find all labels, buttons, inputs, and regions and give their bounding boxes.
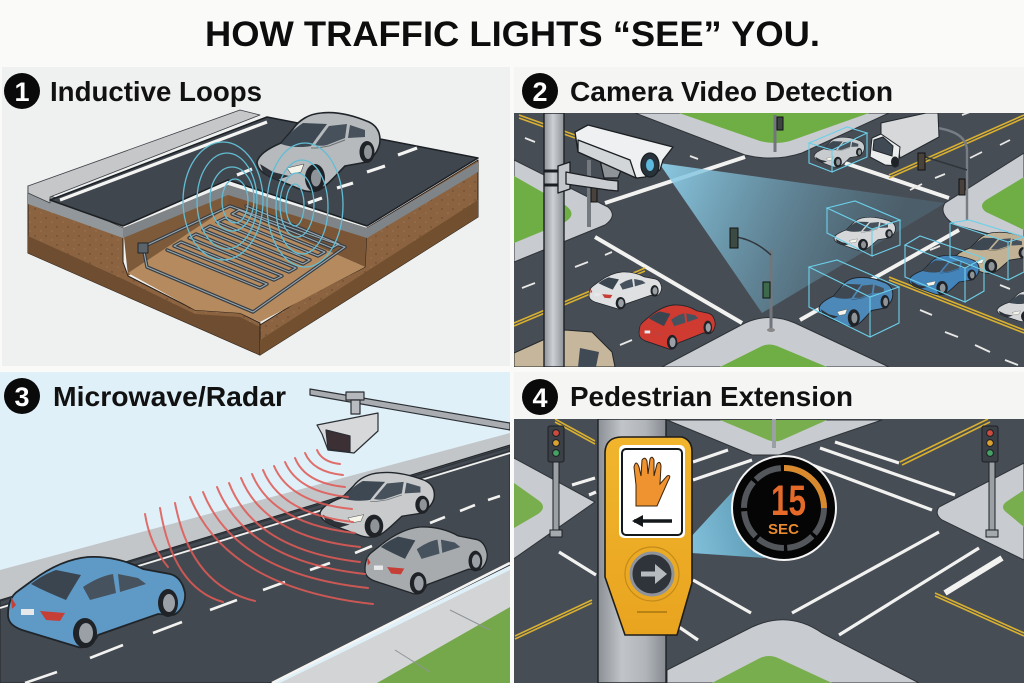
- heading: inductive loops: 1: [14, 77, 30, 107]
- sign: stop hand and arrow: [619, 445, 685, 538]
- push button: [625, 547, 679, 601]
- box truck: [870, 113, 939, 167]
- yellow centre lines: [514, 115, 1024, 333]
- heading: microwave radar: 3: [14, 382, 30, 412]
- seconds label: SEC: [768, 521, 799, 538]
- heading: camera video detection: Camera Video Detection: [570, 76, 893, 107]
- crosswalk lines: [559, 442, 979, 640]
- panel: inductive loops: [2, 67, 510, 366]
- push button unit: [605, 437, 692, 635]
- sidewalks and grass: [512, 420, 1024, 683]
- countdown display: [732, 456, 836, 560]
- intersection scene: [514, 112, 1024, 367]
- title: HOW TRAFFIC LIGHTS “SEE” YOU.: [205, 15, 820, 54]
- security camera: [544, 125, 673, 193]
- vehicles: [320, 472, 434, 538]
- heading: inductive loops: Inductive Loops: [50, 76, 262, 107]
- detection boxes: [809, 127, 1024, 337]
- yellow centre lines: [515, 419, 1024, 639]
- heading: pedestrian extension: 4: [532, 383, 548, 413]
- traffic lights: [589, 115, 967, 332]
- radar arcs: [145, 450, 373, 604]
- car: grey sedan: [257, 113, 380, 192]
- gantry arm and radar sensor: [310, 389, 510, 453]
- panel: camera video detection: [514, 67, 1024, 367]
- sidewalks and grass: [514, 113, 1024, 367]
- heading: pedestrian extension: Pedestrian Extension: [570, 381, 853, 412]
- countdown digits: 15: [771, 477, 806, 525]
- crosswalk lines: [595, 157, 959, 323]
- magnetic field rings: [183, 142, 343, 267]
- pole: [544, 113, 564, 367]
- signal post: [598, 419, 666, 683]
- callout beam: [692, 490, 765, 558]
- traffic light right: [982, 426, 998, 537]
- camera view cone: [659, 163, 945, 313]
- panel: pedestrian extension: [512, 372, 1024, 683]
- panel: microwave radar: [0, 372, 510, 683]
- vehicles: [814, 137, 864, 167]
- heading: camera video detection: 2: [532, 77, 548, 107]
- intersection scene: [512, 419, 1024, 683]
- heading: microwave radar: Microwave/Radar: [53, 381, 286, 412]
- road cross-section block: [28, 110, 478, 355]
- lane dashes: [522, 112, 1018, 365]
- lane dashes: [25, 496, 500, 683]
- top pole: [772, 419, 776, 448]
- wire coil: [138, 206, 345, 312]
- sidewalk and road: [0, 433, 510, 683]
- tan vehicle: [514, 330, 615, 367]
- traffic light left: [548, 426, 564, 537]
